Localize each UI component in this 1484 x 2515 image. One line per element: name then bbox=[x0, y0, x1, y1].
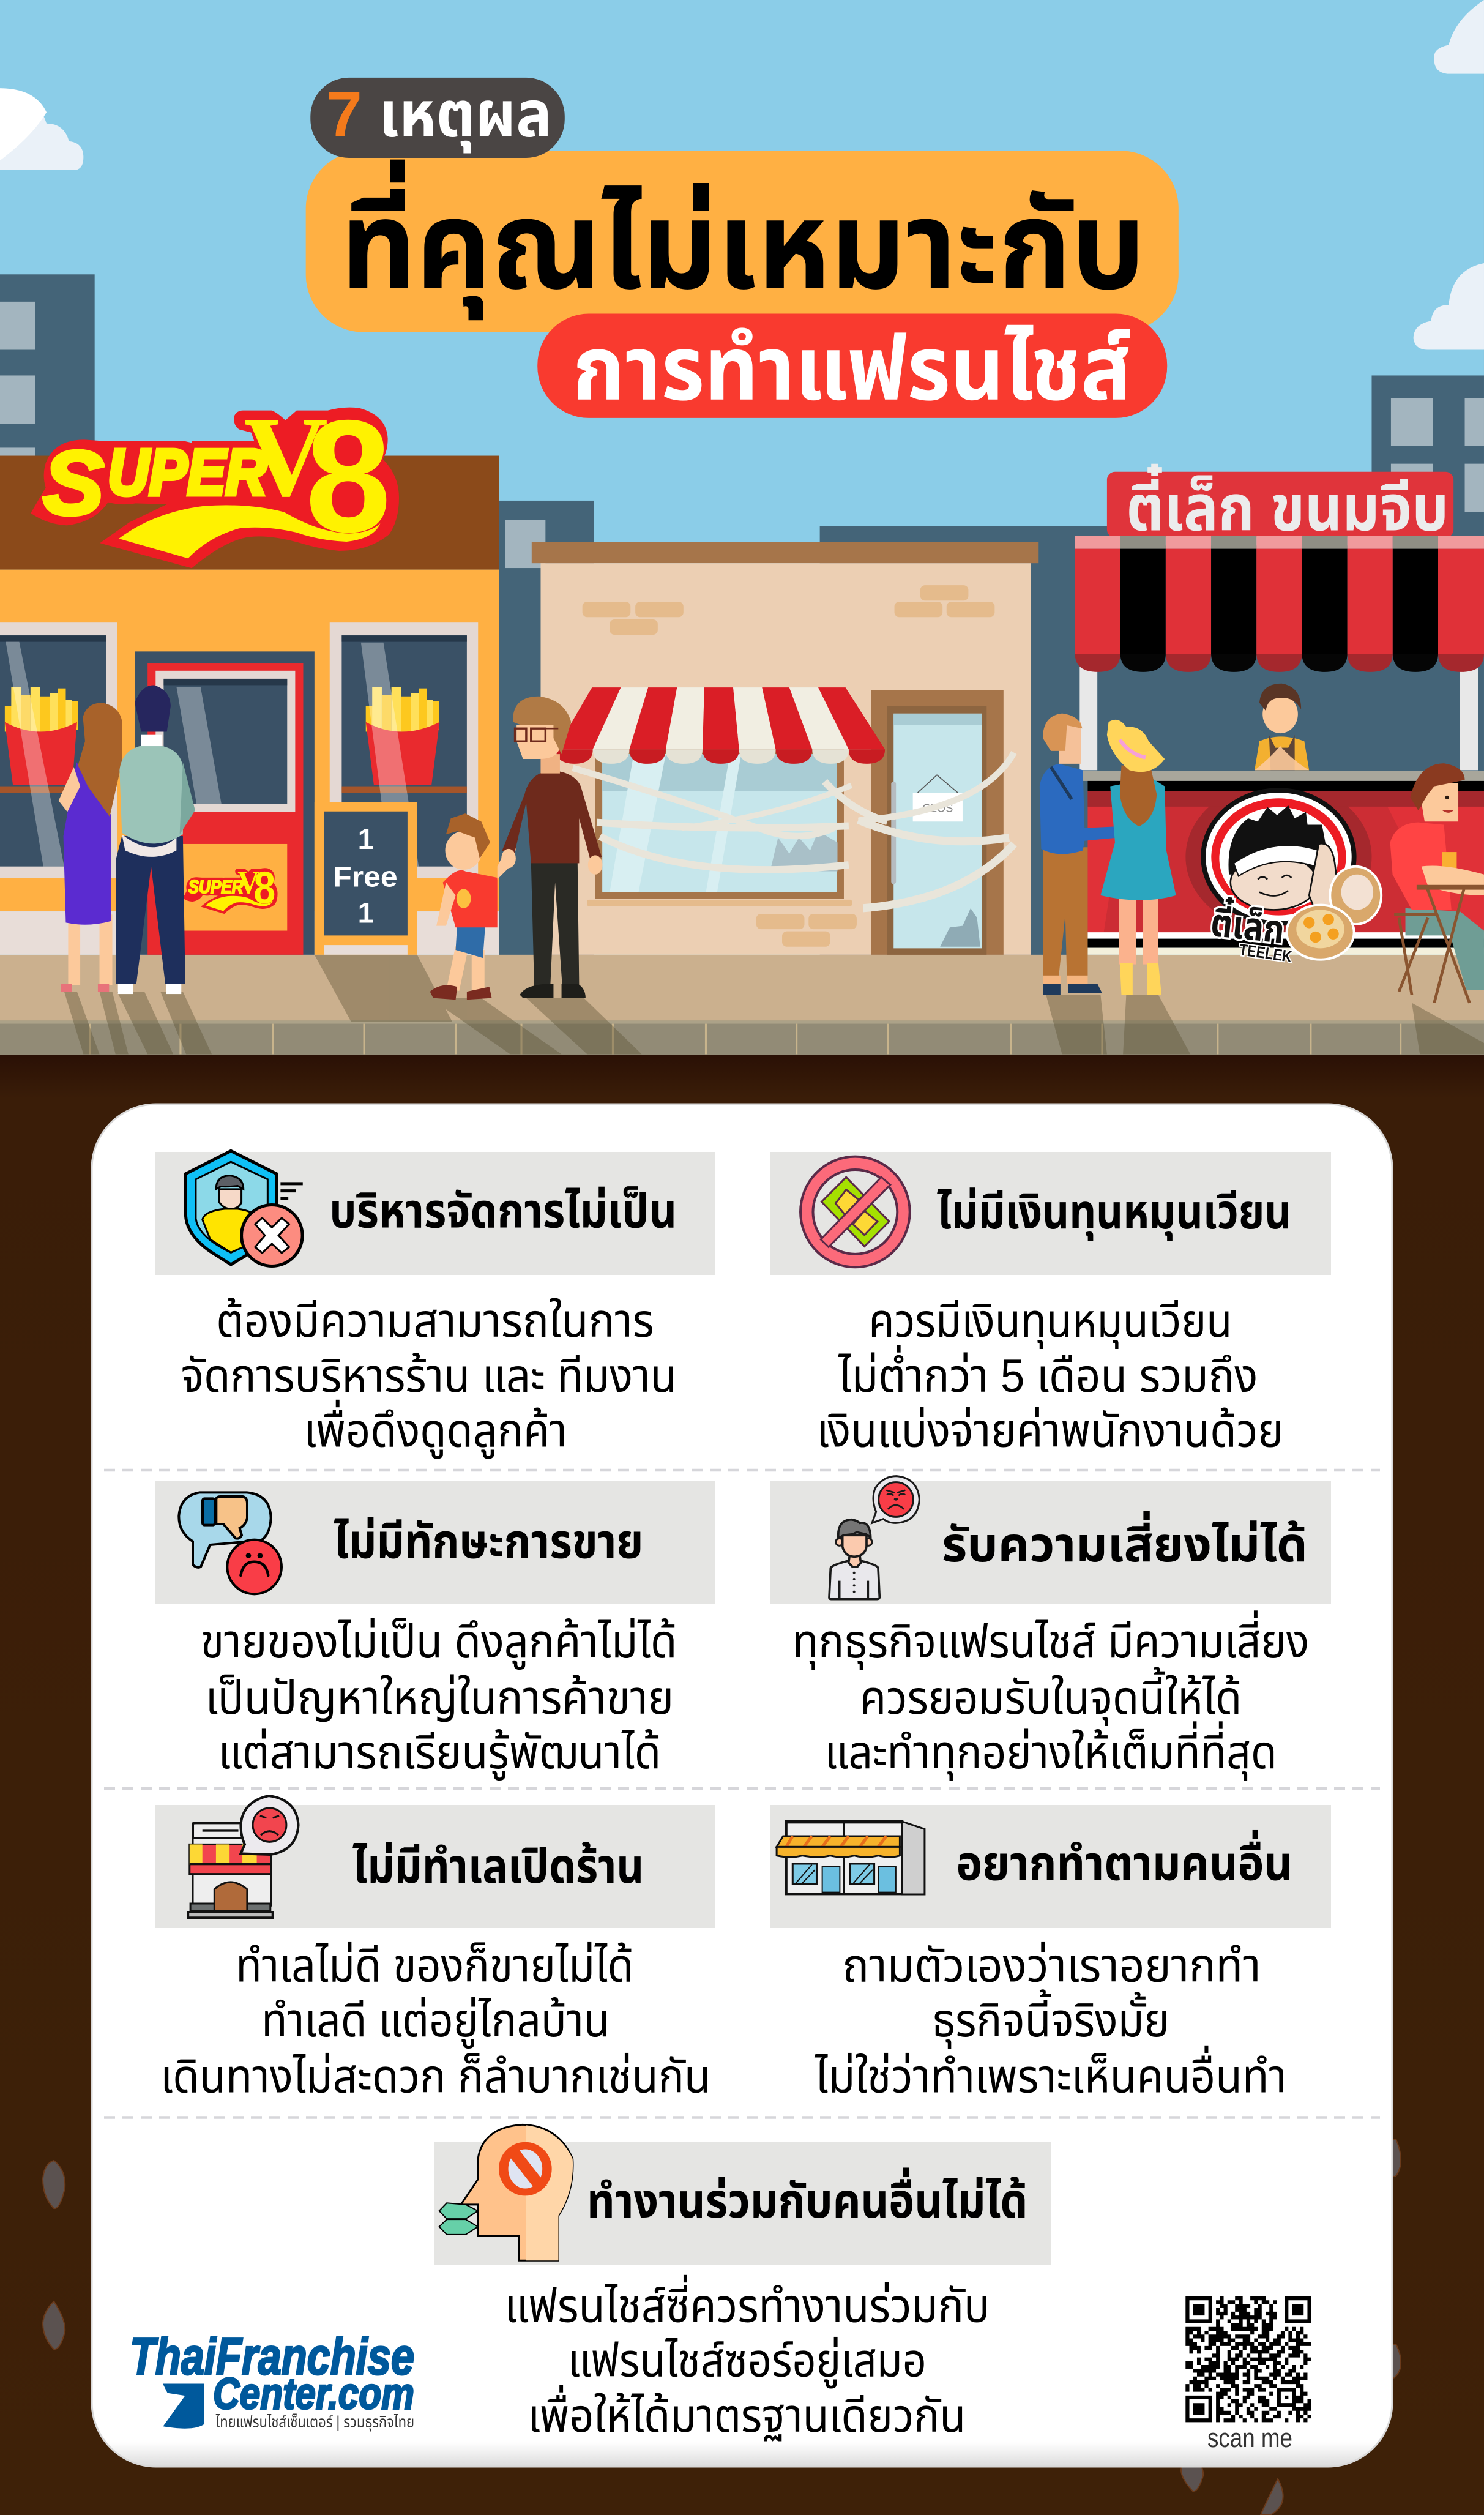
reason 7 description: แฟรนไชส์ซี่ควรทำงานร่วมกับ bbox=[504, 2274, 990, 2332]
logo outline and swoosh bbox=[31, 408, 399, 568]
Teelek logo bbox=[1201, 788, 1381, 966]
reason 5 heading: ไม่มีทำเลเปิดร้าน bbox=[352, 1839, 644, 1893]
promo A-board: 1 bbox=[358, 896, 374, 929]
ThaiFranchise Center logo: ThaiFranchise bbox=[130, 2328, 414, 2385]
street scene background bbox=[0, 0, 1484, 1059]
boy in red T-shirt bbox=[430, 813, 516, 1000]
reason 5 description: เดินทางไม่สะดวก ก็ลำบากเช่นกัน bbox=[160, 2051, 710, 2103]
title block bbox=[306, 78, 1179, 419]
Teelek logo: TEELEK bbox=[1238, 940, 1293, 966]
title red panel: การทำแฟรนไชส์ bbox=[573, 319, 1131, 419]
reason 6 description: ถามตัวเองว่าเราอยากทำ bbox=[842, 1940, 1261, 1992]
icon: closed shop with sad bubble bbox=[188, 1796, 299, 1918]
sidewalk bbox=[0, 955, 1484, 1056]
reason 4 bbox=[770, 1476, 1331, 1781]
logo wording: ตี๋เล็ก bbox=[1209, 895, 1288, 952]
title orange panel: ที่คุณไม่เหมาะกับ bbox=[341, 159, 1146, 321]
title badge: 7 reasons: เหตุผล bbox=[379, 79, 552, 153]
reason 4 description: และทำทุกอย่างให้เต็มที่ที่สุด bbox=[825, 1721, 1277, 1781]
QR code bbox=[1185, 2296, 1311, 2453]
man in mint sweater bbox=[116, 685, 195, 994]
reason 1 description: ต้องมีความสามารถในการ bbox=[216, 1295, 654, 1347]
wall with closed shop bbox=[532, 542, 1038, 955]
man in blue sweater bbox=[1040, 714, 1138, 995]
woman in teal dress and hat bbox=[1100, 720, 1176, 995]
reason 7 heading: ทำงานร่วมกับคนอื่นไม่ได้ bbox=[587, 2167, 1027, 2228]
reason 7 description: เพื่อให้ได้มาตรฐานเดียวกัน bbox=[528, 2385, 966, 2442]
reason 4 heading bar bbox=[770, 1481, 1331, 1604]
steamer baskets bbox=[1287, 867, 1381, 960]
ThaiFranchise Center logo: Center.com bbox=[213, 2370, 414, 2419]
reason 4 description bbox=[792, 1610, 1309, 1781]
ThaiFranchise Center logo: ไทยแฟรนไชส์เซ็นเตอร์ | รวมธุรกิจไทย bbox=[215, 2413, 414, 2432]
Super V8 main logo bbox=[31, 387, 399, 568]
reason 3 heading bar bbox=[155, 1481, 715, 1604]
icon: head with no sign bbox=[439, 2124, 573, 2260]
right window bbox=[330, 622, 478, 878]
shop door bbox=[871, 690, 1004, 955]
mascot bbox=[1228, 805, 1351, 911]
A-board and mini logo bbox=[183, 802, 417, 955]
title badge: 7 reasons: 7 bbox=[326, 79, 362, 151]
scan me label: scan me bbox=[1207, 2423, 1292, 2453]
reason 3 description bbox=[201, 1616, 677, 1781]
reason 6 heading bar bbox=[770, 1805, 1331, 1928]
reason 5 description bbox=[160, 1940, 710, 2103]
reason 2 description: เงินแบ่งจ่ายค่าพนักงานด้วย bbox=[816, 1405, 1283, 1457]
people on the street bbox=[59, 685, 1484, 1054]
reason 2 bbox=[770, 1152, 1331, 1457]
Super V8 main logo: 8 bbox=[305, 387, 391, 566]
tape across closed shop bbox=[573, 753, 1014, 908]
reason 1 description: เพื่อดึงดูดลูกค้า bbox=[304, 1399, 567, 1459]
mini Super V8 logo on door: SUPER bbox=[188, 877, 244, 897]
reason 6 description: ไม่ใช่ว่าทำเพราะเห็นคนอื่นทำ bbox=[815, 2046, 1287, 2103]
mini Super V8 logo on door bbox=[183, 863, 278, 914]
ThaiFranchise Center logo bbox=[130, 2328, 414, 2432]
reason 3 description: เป็นปัญหาใหญ่ในการค้าขาย bbox=[206, 1672, 674, 1724]
reason 4 description: ทุกธุรกิจแฟรนไชส์ มีความเสี่ยง bbox=[792, 1610, 1309, 1670]
Super V8 shop bbox=[0, 456, 499, 955]
logo wording: S bbox=[43, 433, 104, 534]
street food stall bbox=[1075, 463, 1484, 955]
icon: no money bbox=[800, 1157, 910, 1267]
reason 3 bbox=[155, 1481, 715, 1781]
woman in purple dress bbox=[59, 703, 122, 992]
left window bbox=[0, 622, 117, 878]
reason 1 description: จัดการบริหารร้าน และ ทีมงาน bbox=[181, 1350, 677, 1402]
reason 2 description bbox=[816, 1295, 1283, 1457]
reason 2 heading: ไม่มีเงินทุนหมุนเวียน bbox=[937, 1185, 1291, 1241]
shop door: CLOS bbox=[922, 802, 953, 815]
clouds bbox=[0, 0, 1484, 350]
reason 1 bbox=[155, 1151, 715, 1459]
icon: shield with person and X bbox=[185, 1151, 303, 1266]
reason 2 heading bar bbox=[770, 1152, 1331, 1275]
reason 7 bbox=[434, 2124, 1051, 2442]
reason 6 description: ธุรกิจนี้จริงมั้ย bbox=[932, 1989, 1169, 2049]
reason 1 heading: บริหารจัดการไม่เป็น bbox=[329, 1184, 677, 1238]
mini Super V8 logo on door: V bbox=[237, 864, 259, 900]
reason 3 description: แต่สามารถเรียนรู้พัฒนาได้ bbox=[218, 1727, 661, 1781]
title badge: 7 reasons bbox=[310, 78, 565, 158]
reason 1 description bbox=[181, 1295, 677, 1459]
reason 7 heading bar bbox=[434, 2142, 1051, 2265]
striped stall awning bbox=[1075, 536, 1484, 672]
reason 5 description: ทำเลดี แต่อยู่ไกลบ้าน bbox=[261, 1995, 610, 2049]
awning bbox=[556, 687, 885, 764]
reason 2 description: ควรมีเงินทุนหมุนเวียน bbox=[868, 1295, 1232, 1349]
mini Super V8 logo on door: 8 bbox=[253, 863, 275, 914]
reason 5 bbox=[155, 1796, 715, 2103]
row dividers bbox=[104, 1470, 1380, 2118]
reason 2 description: ไม่ต่ำกว่า 5 เดือน รวมถึง bbox=[838, 1345, 1258, 1402]
icon: thumbs down speech bubble bbox=[179, 1492, 282, 1594]
door bbox=[135, 651, 315, 955]
icon: logo arrow bbox=[160, 2382, 206, 2430]
reason 6 bbox=[770, 1805, 1331, 2103]
seated customer bbox=[1390, 763, 1484, 1003]
reason 3 heading: ไม่มีทักษะการขาย bbox=[334, 1515, 643, 1569]
promo A-board: Free bbox=[333, 861, 398, 893]
background buildings bbox=[0, 274, 1484, 956]
stall sign: ตี๋เล็ก ขนมจีบ bbox=[1126, 463, 1449, 545]
reason 5 description: ทำเลไม่ดี ของก็ขายไม่ได้ bbox=[236, 1940, 634, 1992]
reason 6 heading: อยากทำตามคนอื่น bbox=[956, 1830, 1292, 1891]
promo A-board bbox=[315, 802, 417, 955]
Super V8 main logo: UPER bbox=[108, 436, 267, 509]
reason 7 description: แฟรนไชส์ซอร์อยู่เสมอ bbox=[568, 2335, 927, 2389]
icon: row of shops bbox=[777, 1822, 925, 1894]
reason 7 description bbox=[504, 2274, 990, 2442]
reason 4 heading: รับความเสี่ยงไม่ได้ bbox=[942, 1511, 1308, 1572]
reason 5 heading bar bbox=[155, 1805, 715, 1928]
Super V8 main logo: V bbox=[244, 394, 328, 520]
vendor bbox=[1255, 684, 1309, 770]
reason 3 description: ขายของไม่เป็น ดึงลูกค้าไม่ได้ bbox=[201, 1616, 677, 1670]
promo A-board: 1 bbox=[358, 823, 374, 855]
main white card bbox=[92, 1104, 1392, 2467]
reason 6 description bbox=[815, 1940, 1287, 2103]
icon: worried man with thought bubble bbox=[829, 1476, 919, 1599]
soil ground bbox=[0, 1055, 1484, 2515]
reason 1 heading bar bbox=[155, 1152, 715, 1275]
reason 4 description: ควรยอมรับในจุดนี้ให้ได้ bbox=[860, 1667, 1242, 1726]
man with glasses bbox=[501, 697, 602, 998]
shop window bbox=[595, 746, 844, 899]
sky bbox=[0, 0, 1484, 1059]
sidewalk shadows bbox=[64, 955, 1484, 1054]
